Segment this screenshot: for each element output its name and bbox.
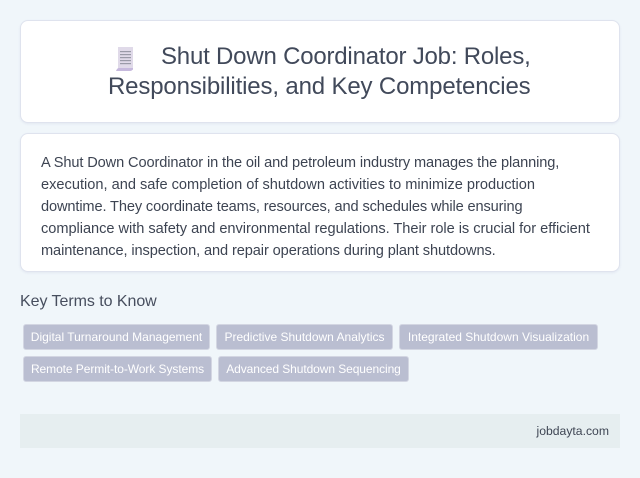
description text: downtime. They coordinate teams, resources, and schedules while ensuring — [41, 199, 523, 215]
tag: Advanced Shutdown Sequencing — [226, 362, 401, 376]
description text: A Shut Down Coordinator in the oil and petroleum industry manages the planning, — [41, 155, 559, 171]
tag — [216, 324, 393, 350]
tag: Digital Turnaround Management — [31, 330, 202, 344]
tag — [218, 356, 409, 382]
description text: execution, and safe completion of shutdown activities to minimize production — [41, 177, 535, 193]
description text — [41, 155, 590, 259]
footer site name: jobdayta.com — [536, 424, 609, 438]
icon: document — [116, 47, 133, 71]
tag — [23, 356, 212, 382]
tag list — [23, 324, 598, 382]
tag: Integrated Shutdown Visualization — [408, 330, 589, 344]
panel: title card — [20, 20, 620, 123]
tag: Remote Permit-to-Work Systems — [31, 362, 204, 376]
panel: description card — [20, 133, 620, 272]
tag: Predictive Shutdown Analytics — [224, 330, 385, 344]
tag — [23, 324, 210, 350]
heading: key terms: Key Terms to Know — [20, 293, 157, 310]
description text: compliance with safety and environmental regulations. Their role is crucial for efficient — [41, 221, 590, 237]
title: Shut Down Coordinator Job: Roles, — [161, 43, 531, 70]
tag — [399, 324, 598, 350]
description text: maintenance, inspection, and repair operations during plant shutdowns. — [41, 243, 496, 259]
footer bar — [20, 414, 620, 448]
title: Responsibilities, and Key Competencies — [108, 73, 531, 100]
title — [108, 43, 531, 100]
